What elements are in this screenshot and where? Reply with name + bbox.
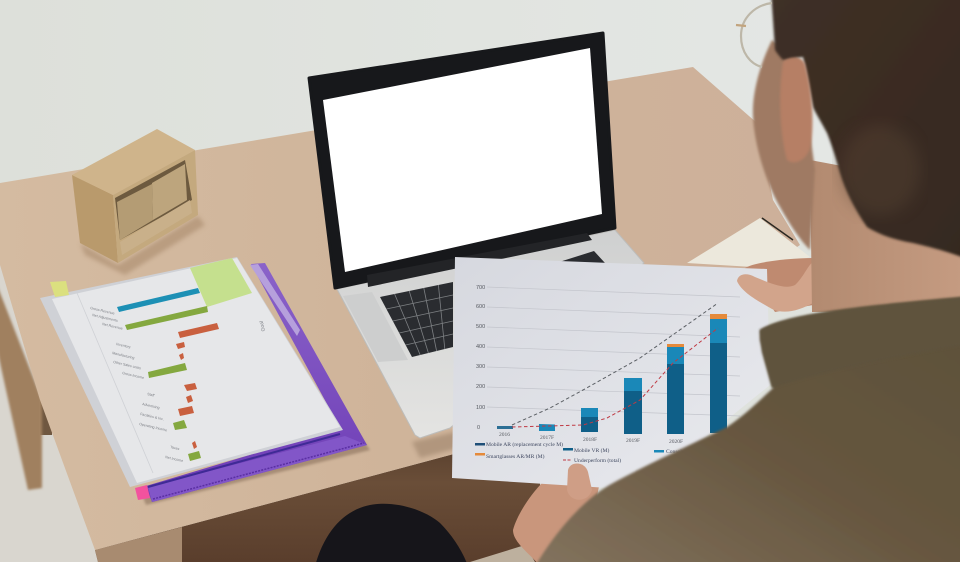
desk front block <box>95 527 182 562</box>
pink tab <box>135 485 150 500</box>
keyboard <box>380 282 453 357</box>
laptop <box>309 33 644 458</box>
y axis labels: 700 <box>476 285 485 291</box>
x axis labels: 2019F <box>626 438 640 444</box>
thumb at bottom of sheet <box>567 463 592 500</box>
laptop base <box>337 230 644 438</box>
yellow tab <box>50 281 69 297</box>
hair highlight <box>840 125 920 215</box>
gray dashed trend line <box>512 303 718 425</box>
keyboard key gaps <box>386 285 453 355</box>
sheet <box>452 257 770 490</box>
glasses <box>736 3 772 67</box>
hair <box>771 0 960 262</box>
stacked bars <box>497 314 727 434</box>
chart legend: Smartglasses AR/MR (M) <box>486 453 545 460</box>
shirt collar <box>760 296 960 388</box>
chart legend: Mobile VR (M) <box>574 447 609 454</box>
financial chart labels: Gross Revenue <box>90 306 115 316</box>
x axis labels: 2016 <box>499 432 510 438</box>
y axis labels: 600 <box>476 304 485 310</box>
floor <box>0 240 560 562</box>
face side <box>753 40 815 250</box>
laptop shadow <box>412 432 470 458</box>
financial chart labels: Net Revenue <box>102 322 123 331</box>
notebook page <box>687 218 810 268</box>
box left face <box>72 175 118 263</box>
fingers behind sheet <box>745 258 813 312</box>
financial chart labels: Staff <box>147 392 155 398</box>
laptop screen bezel <box>309 33 615 288</box>
ear <box>780 58 812 162</box>
desk front apron <box>95 430 540 562</box>
financial chart labels: Other Sales costs <box>113 360 142 370</box>
front sheet <box>52 258 340 483</box>
document stack <box>40 257 343 487</box>
financial chart labels: Advertising <box>142 402 160 410</box>
y axis labels <box>476 285 485 431</box>
man <box>530 0 960 562</box>
financial chart labels: Manufacturing <box>112 351 135 360</box>
y axis labels: 200 <box>476 384 485 390</box>
box right frame <box>113 150 198 263</box>
column divider <box>77 293 153 473</box>
financial chart labels: Operating Income <box>139 422 168 432</box>
box drawer panel one <box>117 184 153 240</box>
chart legend: Mobile AR (replacement cycle M) <box>486 441 563 448</box>
laptop screen <box>323 48 602 272</box>
thumb on right side of sheet <box>737 262 813 312</box>
y axis labels: 500 <box>476 324 485 330</box>
desk top <box>0 67 800 550</box>
y axis labels: 0 <box>477 425 480 431</box>
financial chart labels: Goal <box>259 320 267 332</box>
bottom hand <box>513 482 600 562</box>
folder light flap <box>250 264 300 336</box>
notebook <box>687 218 810 268</box>
x axis labels <box>499 432 683 445</box>
chart legend: Underperform (total) <box>574 457 621 464</box>
upper right keys <box>556 251 605 263</box>
neck <box>810 160 960 312</box>
financial chart labels: Gross Income <box>122 371 144 380</box>
box drawer panel two <box>152 164 187 220</box>
shirt <box>530 296 960 562</box>
financial chart labels: Inventory <box>116 342 131 349</box>
box top face <box>72 129 195 195</box>
black knee <box>315 504 468 562</box>
red dashed trend line <box>512 328 718 427</box>
financial chart labels <box>90 306 267 463</box>
sticky note <box>190 258 252 307</box>
financial chart labels: Facilities & Inc. <box>140 412 164 421</box>
box ledge <box>120 200 192 255</box>
financial chart labels: Net Adjustments <box>92 313 118 323</box>
folder seam <box>153 443 364 499</box>
box shadow <box>80 216 205 275</box>
x axis labels: 2017F <box>540 435 554 441</box>
desk leg left <box>0 280 42 490</box>
folder shadow <box>140 436 370 505</box>
held chart sheet <box>452 257 770 490</box>
folder bottom band <box>148 436 367 502</box>
back sheets <box>40 257 343 487</box>
back desk leg <box>40 390 52 435</box>
financial chart labels: Net Income <box>165 455 184 463</box>
x axis labels: 2018F <box>583 437 597 443</box>
wooden box <box>72 129 205 275</box>
financial chart labels: Taxes <box>170 445 180 451</box>
folder body <box>146 263 367 502</box>
purple folder <box>135 263 370 505</box>
bars in financial chart <box>117 288 219 461</box>
chart legend <box>475 441 685 464</box>
grid lines <box>487 287 740 416</box>
notebook cover edge <box>762 218 793 240</box>
wall background <box>0 0 960 240</box>
laptop hinge <box>367 233 592 287</box>
y axis labels: 100 <box>476 405 485 411</box>
left keyboard well <box>343 292 408 362</box>
folder dark inner line <box>148 434 340 487</box>
y axis labels: 300 <box>476 364 485 370</box>
chart legend: Console <box>666 449 685 455</box>
x axis labels: 2020F <box>669 439 683 445</box>
y axis labels: 400 <box>476 344 485 350</box>
floor gap under apron <box>470 545 535 562</box>
box opening <box>115 160 192 240</box>
